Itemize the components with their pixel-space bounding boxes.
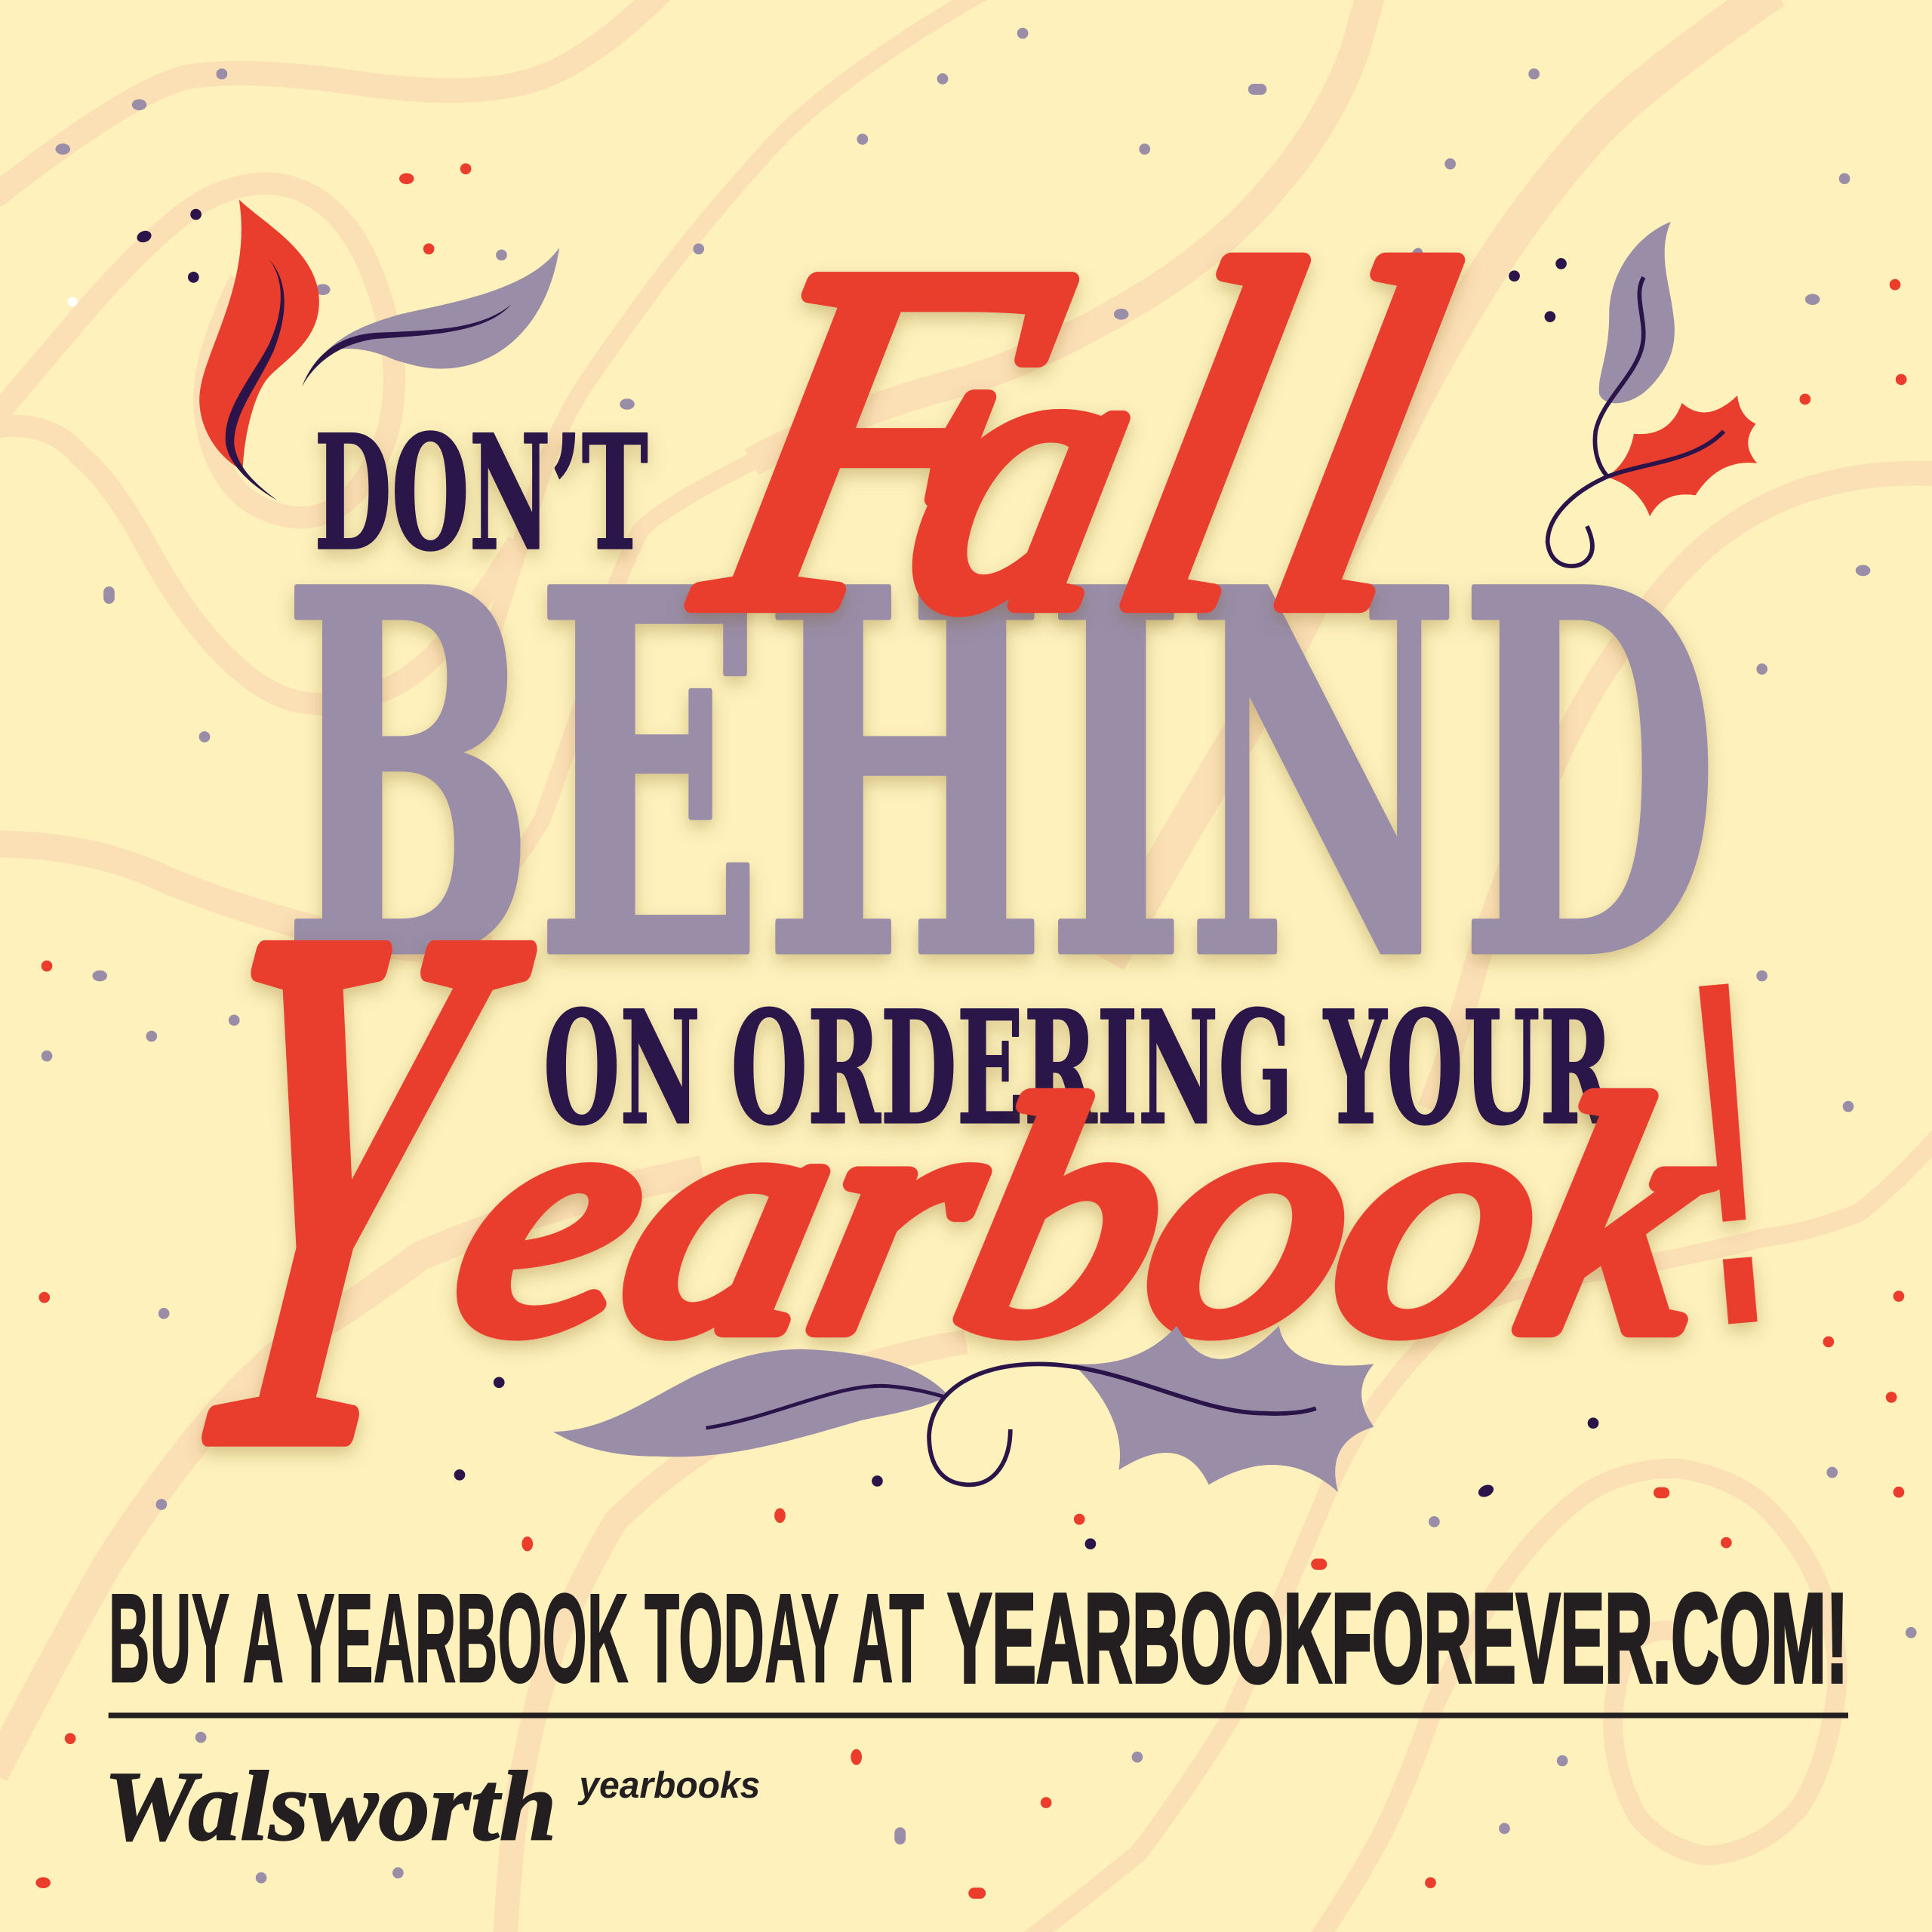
icon: top-left autumn leaves	[199, 199, 559, 500]
script heading: Fall	[666, 165, 1487, 710]
script heading: Fall: l	[1234, 165, 1487, 710]
logo: Walsworth yearbooks: Walsworth	[103, 1751, 557, 1862]
divider rule	[109, 1712, 1848, 1718]
icon: bottom leaf ornament	[553, 1326, 1374, 1492]
script heading: Yearbook	[144, 777, 1787, 1595]
script heading: Fall: l	[1080, 165, 1333, 710]
script heading: Fall: F	[666, 165, 1097, 710]
logo: Walsworth yearbooks	[103, 1751, 760, 1862]
icon: top-right leaves	[1548, 222, 1757, 566]
logo: Walsworth yearbooks: yearbooks	[577, 1765, 760, 1806]
call to action: buy a yearbook: BUY A YEARBOOK TODAY AT	[109, 1567, 924, 1709]
script heading: Fall: a	[881, 253, 1171, 690]
script heading: Yearbook: earbook	[431, 1032, 1750, 1401]
script heading: Yearbook: Y	[144, 777, 560, 1595]
heading: DON'T: DON’T	[314, 401, 648, 586]
script heading: Yearbook: !	[1670, 877, 1787, 1431]
